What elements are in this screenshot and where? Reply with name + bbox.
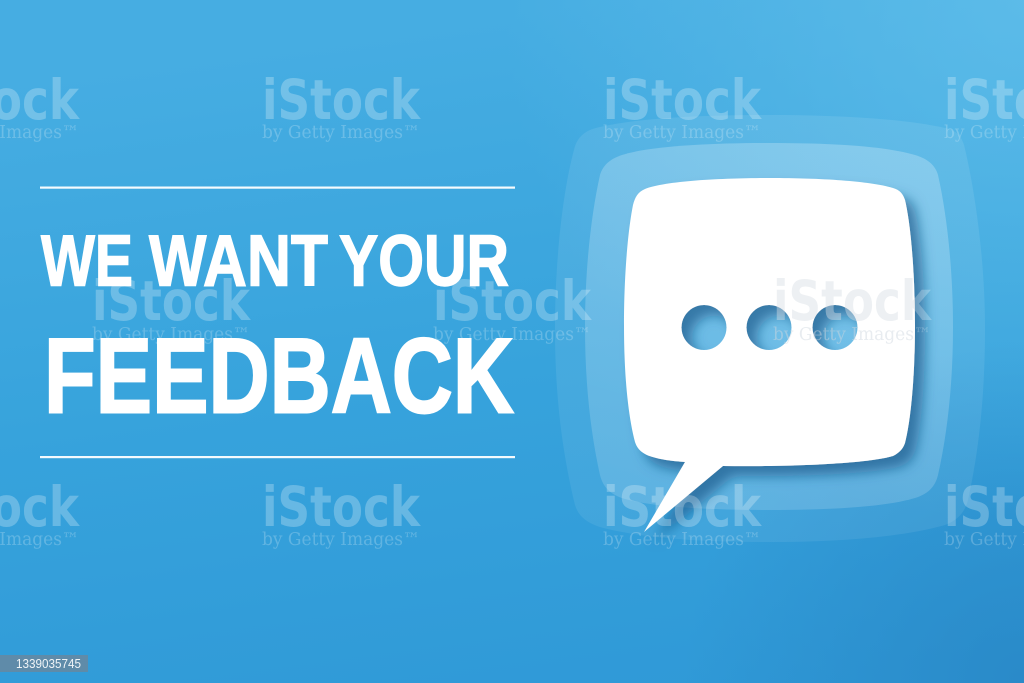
image id tag: [0, 655, 88, 672]
bottom divider line: [40, 456, 515, 458]
watermark row 3: by Getty Images™: [603, 530, 761, 550]
watermark row 3: [0, 475, 1024, 550]
watermark over the white bubble: iStock: [773, 269, 932, 333]
watermark row 2: iStock: [433, 269, 592, 333]
watermark row 2: by Getty Images™: [92, 325, 250, 345]
watermark row 1: by Getty Images™: [262, 123, 420, 143]
heading: we want your: YOUR: [339, 222, 509, 302]
watermark row 3: by Getty Images™: [262, 530, 420, 550]
watermark row 1: iStock: [262, 68, 421, 132]
heading: we want your: [41, 222, 509, 302]
heading: we want your: WE: [41, 222, 133, 302]
watermark row 2: by Getty Images™: [433, 325, 591, 345]
watermark row 3: iStock: [262, 475, 421, 539]
watermark row 1: by Getty Images™: [603, 123, 761, 143]
watermark over the white bubble: by Getty Images™: [773, 325, 931, 345]
watermark row 2: by Getty Images™: [773, 325, 931, 345]
icon: white speech bubble with three dots: [624, 178, 915, 532]
watermark over the white bubble: [774, 278, 914, 344]
top divider line: [40, 186, 515, 189]
inner bubble halo: [585, 143, 953, 510]
watermark row 2: [92, 269, 932, 345]
outer bubble halo: [555, 115, 985, 542]
watermark row 1: [0, 68, 1024, 143]
watermark row 3: iStock: [603, 475, 762, 539]
image id tag: 1339035745: [16, 657, 81, 671]
heading: feedback: FEEDBACK: [44, 316, 514, 436]
watermark row 1: iStock: [603, 68, 762, 132]
watermark row 2: iStock: [773, 269, 932, 333]
watermark row 2: iStock: [92, 269, 251, 333]
heading: we want your: WANT: [149, 222, 328, 302]
